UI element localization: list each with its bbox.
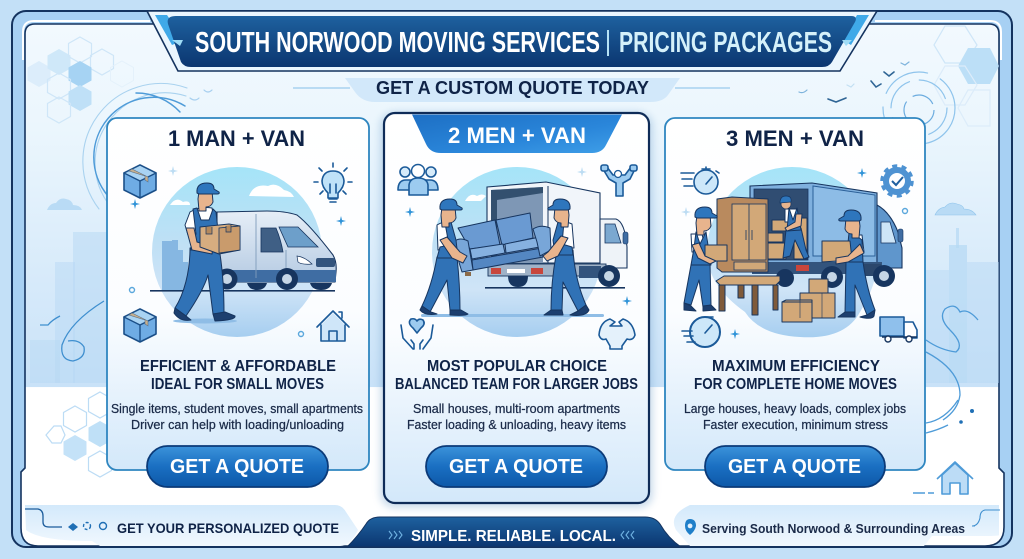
button: get a quote: GET A QUOTE: [449, 456, 583, 478]
illustration: two movers with sofa and truck: [420, 167, 628, 337]
background decoration: hexagons top right: [934, 26, 999, 126]
panel description: [111, 401, 363, 432]
panel headline: [395, 358, 638, 393]
button: get a quote: GET A QUOTE: [728, 456, 861, 478]
icon: strength: [599, 319, 635, 349]
sparkles: [681, 168, 908, 339]
icon: location pin: [685, 519, 696, 535]
background decoration: hexagons top left: [28, 37, 134, 123]
background decoration: birds: [190, 62, 909, 102]
background decoration: signal arcs left: [83, 83, 187, 209]
panel headline: EFFICIENT & AFFORDABLE: [140, 358, 336, 375]
sparkles: [130, 166, 346, 336]
icon: parcel bottom: [124, 309, 156, 342]
panel description: Faster execution, minimum stress: [703, 417, 888, 432]
button: get a quote: GET A QUOTE: [170, 456, 304, 478]
footer left strip: [25, 505, 358, 546]
icon: delivery truck: [880, 317, 917, 342]
background decoration: swirl left: [40, 301, 104, 361]
illustration: three movers with truck and furniture: [684, 167, 903, 337]
background decoration: skyline left: [30, 232, 107, 383]
panel description: Large houses, heavy loads, complex jobs: [684, 401, 906, 416]
panel headline: BALANCED TEAM FOR LARGER JOBS: [395, 376, 638, 393]
panel: 1 man + van: [107, 118, 369, 487]
title accent: PRICING PACKAGES: [619, 27, 832, 59]
subtitle text: GET A CUSTOM QUOTE TODAY: [376, 78, 649, 98]
title: SOUTH NORWOOD MOVING SERVICES: [195, 27, 600, 59]
footer icons: [68, 522, 106, 531]
header banner: [147, 11, 877, 71]
illustration: mover and van: [150, 167, 336, 337]
footer right strip: [674, 505, 1000, 546]
panel headline: [694, 358, 897, 393]
panel description: Single items, student moves, small apartments: [111, 401, 363, 416]
footer right text: Serving South Norwood & Surrounding Areas: [702, 521, 965, 536]
panel: 3 men + van: [665, 118, 925, 487]
icon: light bulb: [314, 163, 352, 202]
icon: stopwatch bottom: [682, 317, 720, 347]
background decoration: swirl right: [926, 306, 978, 433]
icon: lifting figure: [601, 165, 637, 196]
panel description: Small houses, multi-room apartments: [413, 401, 620, 416]
footer center text: SIMPLE. RELIABLE. LOCAL.: [411, 528, 616, 545]
icon: team: [398, 164, 438, 195]
panel heading: 3 MEN + VAN: [726, 126, 864, 151]
button: get a quote: [147, 446, 328, 487]
panel description: Faster loading & unloading, heavy items: [407, 417, 626, 432]
popular tab with heading: 2 MEN + VAN: [448, 123, 586, 148]
panel description: [407, 401, 626, 432]
icon: house: [317, 311, 349, 341]
panel heading: 1 MAN + VAN: [168, 126, 305, 151]
sparkles: [405, 167, 632, 306]
panel description: Driver can help with loading/unloading: [131, 417, 344, 432]
panel description: [684, 401, 906, 432]
panel headline: IDEAL FOR SMALL MOVES: [151, 376, 324, 393]
footer center banner: [347, 517, 681, 547]
background decoration: clouds: [47, 198, 976, 215]
background decoration: skyline right: [925, 228, 999, 383]
icon: stopwatch top: [681, 167, 719, 194]
icon: gear check: [882, 166, 912, 196]
icon: parcel top: [124, 165, 156, 198]
icon: caring hands: [401, 319, 433, 349]
panel headline: MAXIMUM EFFICIENCY: [712, 358, 880, 375]
inner frame white highlight: [23, 21, 1001, 60]
panel headline: MOST POPULAR CHOICE: [427, 358, 607, 375]
panel: 2 men + van: [380, 112, 653, 508]
panel headline: FOR COMPLETE HOME MOVES: [694, 376, 897, 393]
subtitle ribbon: [293, 78, 730, 102]
popular tab with heading: [412, 114, 622, 153]
background decoration: hexagons bottom left: [46, 392, 112, 477]
footer left text: GET YOUR PERSONALIZED QUOTE: [117, 520, 339, 536]
icon: house bottom right: [913, 462, 973, 494]
button: get a quote: [705, 446, 885, 487]
panel headline: [140, 358, 336, 393]
button: get a quote: [426, 446, 607, 487]
background decoration: signal arcs right: [883, 72, 955, 144]
